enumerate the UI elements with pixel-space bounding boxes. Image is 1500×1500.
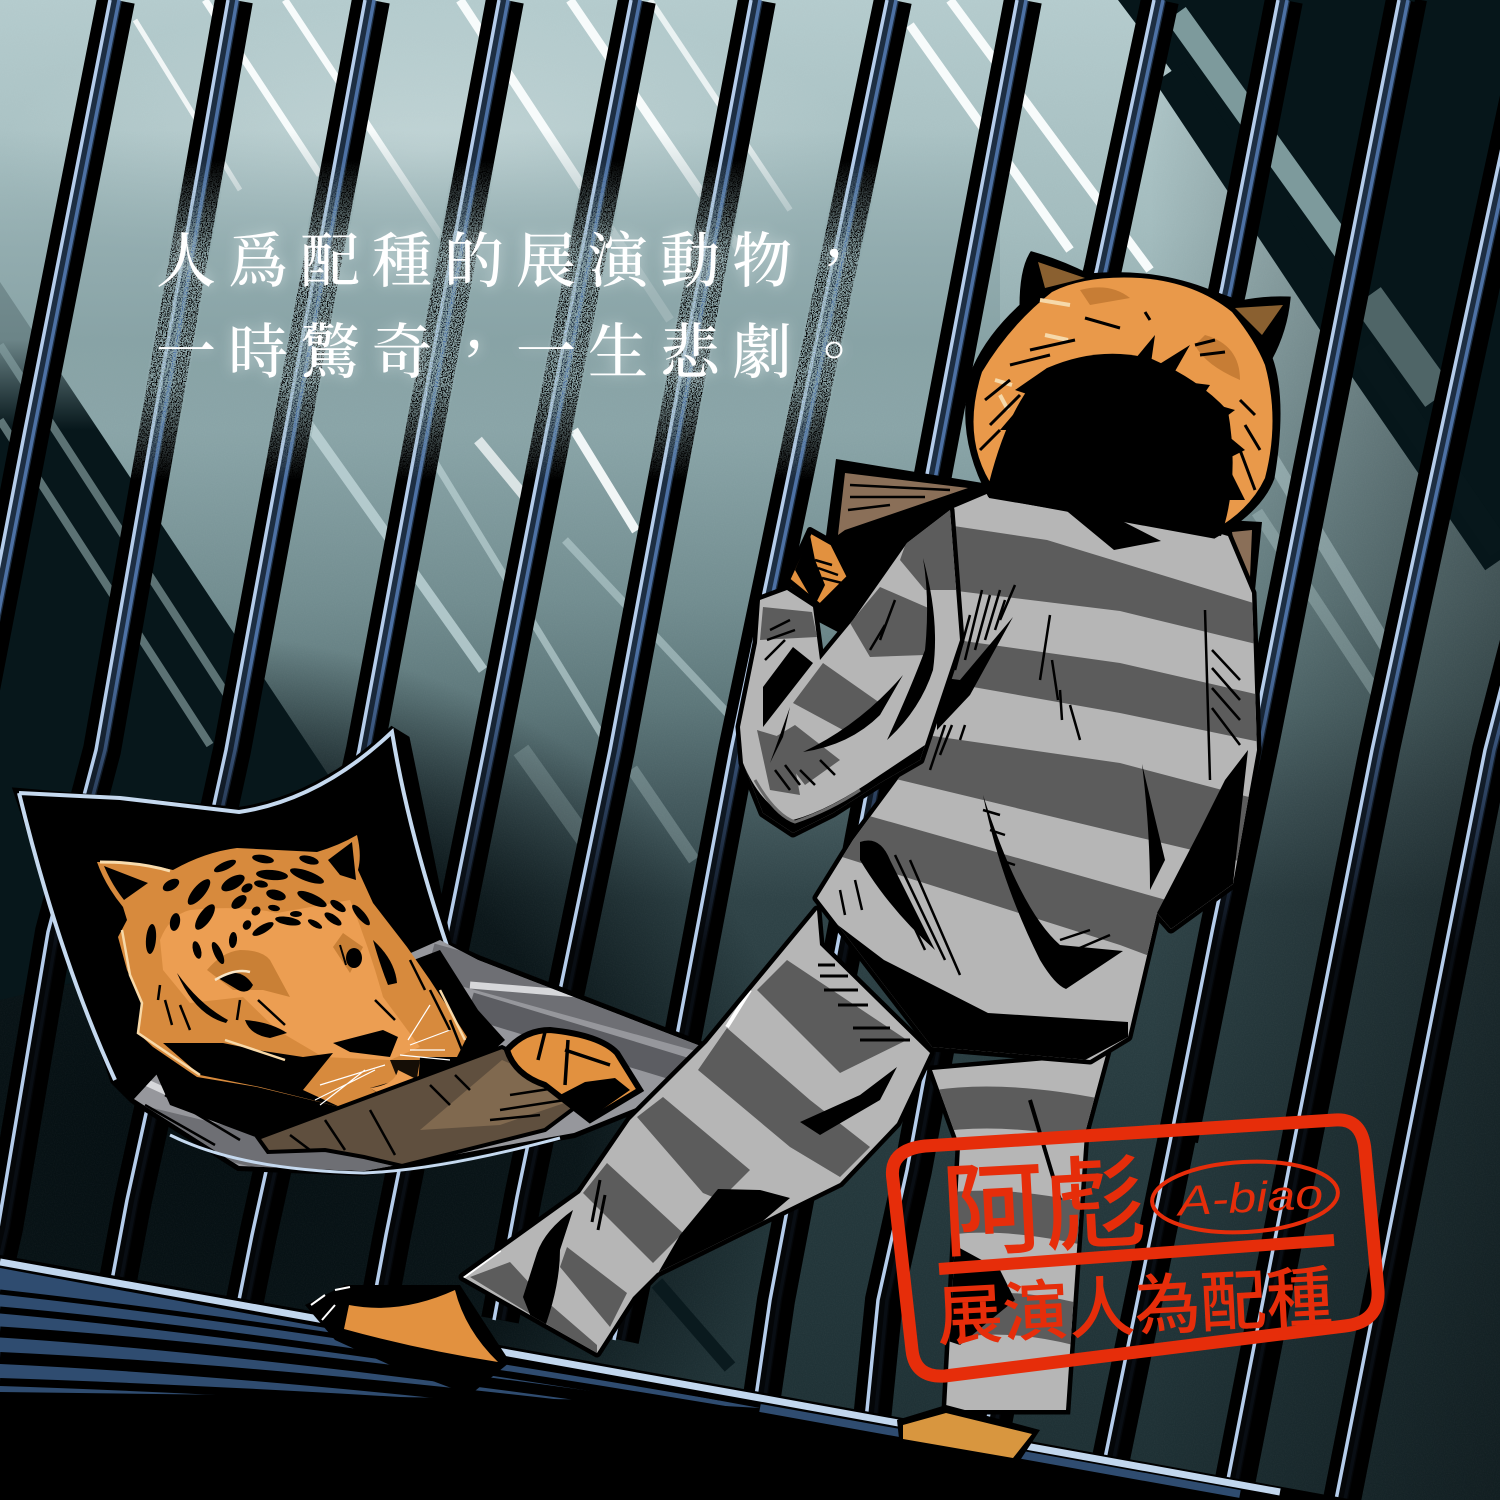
fur fill: [974, 278, 1272, 530]
main caption: 人爲配種的展演動物，: [156, 229, 876, 295]
spots: [145, 853, 397, 1107]
sleeve: [730, 500, 970, 840]
front leg: [927, 1052, 1112, 1414]
board behind the figure: [815, 459, 1262, 650]
striped prisoner figure: [305, 254, 1288, 1468]
black collar shadow: [150, 950, 505, 1138]
pocket: [860, 840, 935, 950]
fur strokes: [158, 960, 462, 1050]
sweater torso: [812, 494, 1262, 1064]
main caption: [156, 229, 876, 386]
tiger head: [97, 835, 467, 1107]
whiskers: [315, 1005, 450, 1105]
back of tiger head: [968, 254, 1288, 536]
pale face: [160, 900, 420, 1060]
head outline with ears: [968, 254, 1288, 536]
main caption: 一時驚奇，一生悲劇。: [156, 320, 876, 386]
right eye: [340, 945, 362, 968]
wider dark right-side bars: [1192, 0, 1500, 1490]
romanized name in ellipse: [1150, 1157, 1340, 1237]
fog dissolving the bars: [132, 165, 878, 475]
leg shading: [658, 1189, 790, 1272]
cloth hem highlight: [170, 1135, 560, 1173]
ear details: [104, 866, 148, 900]
stamp name: 阿彪: [939, 1146, 1149, 1270]
black backdrop: [19, 732, 703, 1171]
left eye: [215, 971, 253, 992]
floor: [0, 1255, 1354, 1500]
black chin mass: [163, 1043, 340, 1107]
black hair mass: [989, 354, 1233, 536]
stamp divider: [939, 1240, 1334, 1269]
back leg: [458, 906, 931, 1358]
hem shadow: [838, 924, 1128, 1060]
cushion with reclining tiger: [19, 732, 720, 1190]
ears: [1038, 262, 1085, 288]
back foot: [305, 1285, 510, 1395]
swoosh wrinkles: [983, 795, 1123, 989]
sleeve folds: [887, 558, 935, 740]
front foot: [897, 1405, 1040, 1468]
fog veil over beams: [0, 130, 1000, 430]
stamp subtitle: 展演人為配種: [935, 1259, 1334, 1354]
romanized name in ellipse: A-biao: [1173, 1170, 1324, 1225]
tiger paw: [507, 1030, 640, 1120]
nose and mouth: [333, 1030, 398, 1057]
collar shadow: [1068, 512, 1161, 550]
brown board: [258, 1047, 593, 1166]
grey cloth: [134, 940, 698, 1171]
white outline: [19, 732, 447, 1080]
fur shading: [1080, 287, 1240, 380]
red stamp: [892, 1120, 1378, 1376]
stamp frame: [892, 1120, 1378, 1376]
hand on bar: [787, 530, 850, 607]
